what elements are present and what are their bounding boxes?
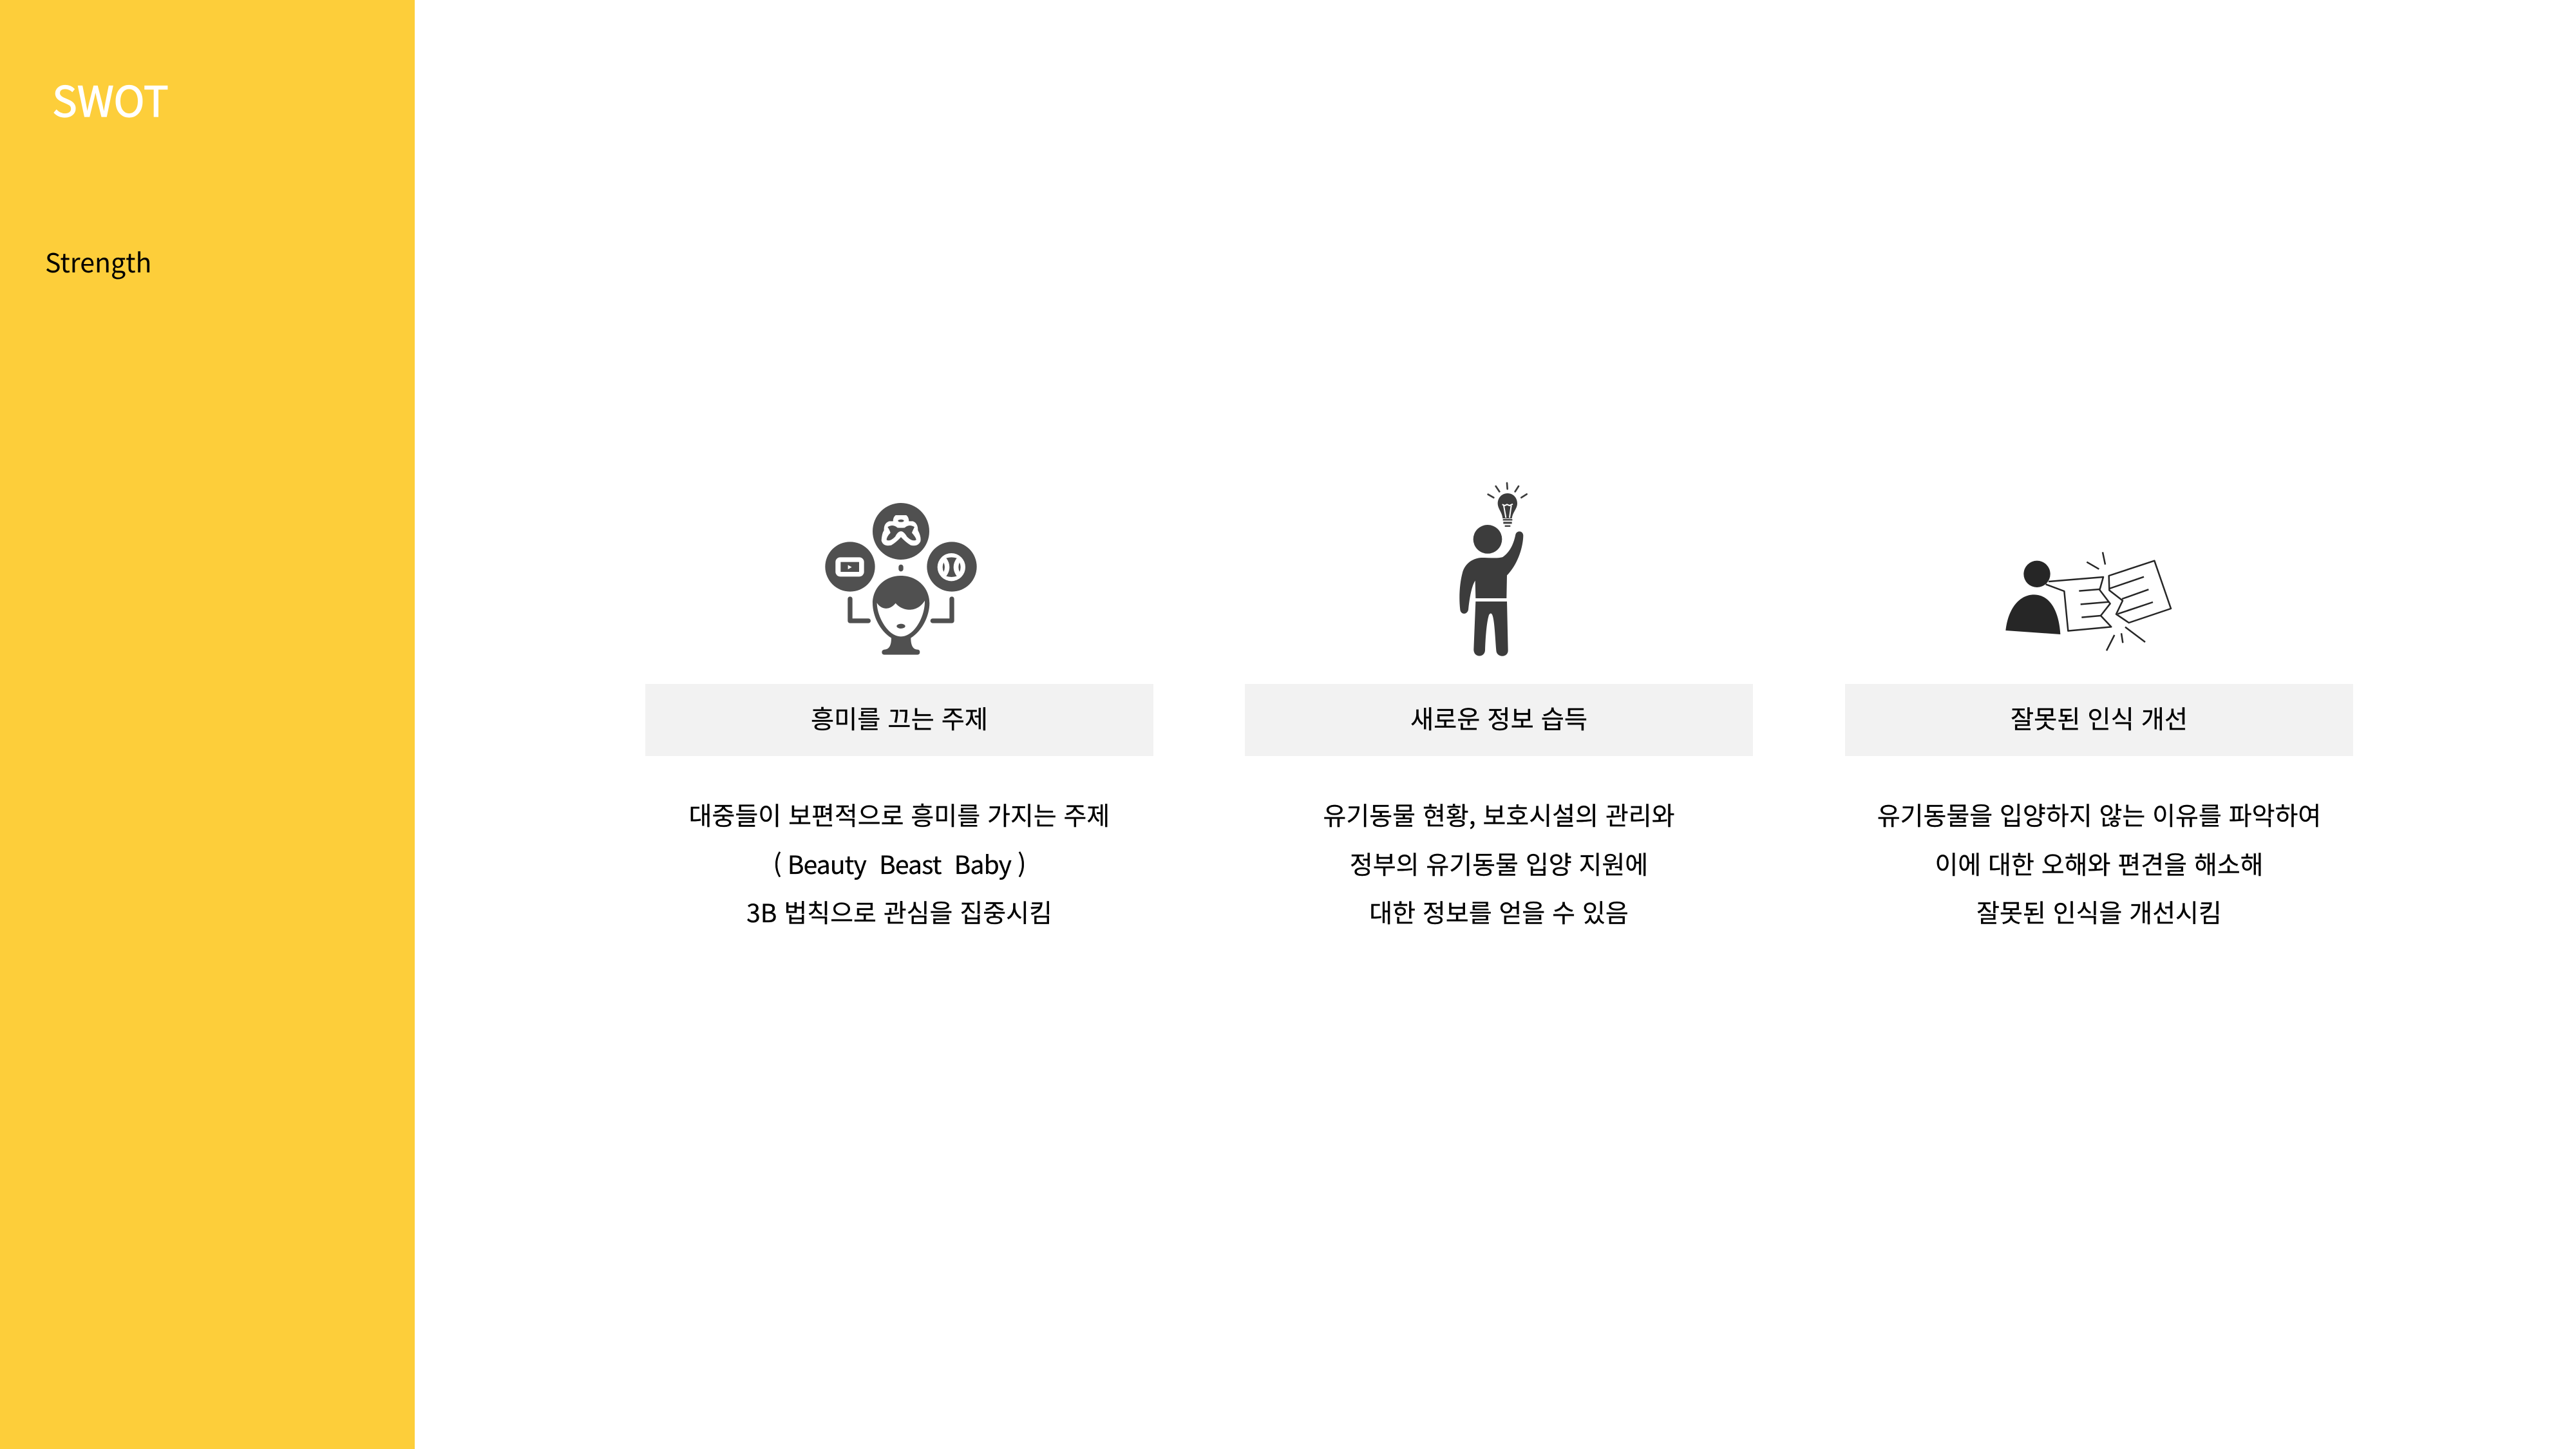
text block: correcting misconceptions description: 유기동물을 입양하지 않는 이유를 파악하여 이에 대한 오해와 편견을 해소해 잘못된 인식을 개선시킴: [1877, 797, 2321, 930]
title: SWOT: SWOT: [52, 68, 169, 129]
icon: person with torn paper: [2005, 552, 2172, 651]
text block: interesting topic description: 대중들이 보편적으로 흥미를 가지는 주제 ( Beauty Beast Baby ) 3B 법칙으로 관심을 집중시킴: [689, 797, 1110, 930]
heading box: interesting topic: [645, 684, 1153, 756]
heading box: correcting misconceptions: 잘못된 인식 개선: [2011, 699, 2188, 736]
panel: yellow sidebar: [0, 0, 415, 1449]
text block: new information description: 유기동물 현황, 보호시설의 관리와 정부의 유기동물 입양 지원에 대한 정보를 얻을 수 있음: [1323, 797, 1674, 930]
heading box: new information: [1245, 684, 1753, 756]
icon: person with light bulb: [1459, 482, 1528, 656]
heading box: correcting misconceptions: [1845, 684, 2353, 756]
heading box: interesting topic: 흥미를 끄는 주제: [811, 699, 988, 736]
heading box: new information: 새로운 정보 습득: [1410, 699, 1587, 736]
subtitle: Strength: Strength: [45, 242, 151, 280]
icon: person with interests: [825, 503, 977, 655]
